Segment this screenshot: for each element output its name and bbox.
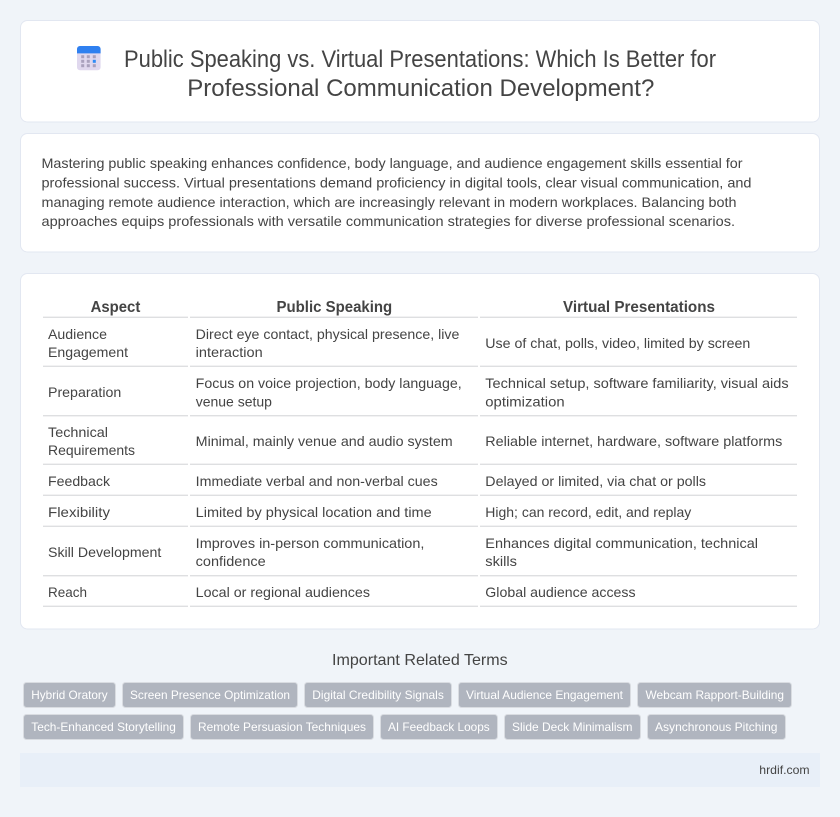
title: Professional Communication Development? <box>187 75 654 102</box>
row: reach: Global audience access <box>485 584 636 600</box>
tag: virtual audience engagement: Virtual Audience Engagement <box>466 688 624 702</box>
title <box>124 46 716 102</box>
row: preparation: optimization <box>485 394 565 410</box>
tag: digital credibility signals: Digital Credibility Signals <box>312 688 444 702</box>
row: technical requirements: Minimal, mainly venue and audio system <box>196 433 453 449</box>
table header row: Aspect <box>91 299 141 316</box>
row: audience engagement <box>48 326 750 360</box>
panel: comparison table <box>20 274 820 629</box>
row: technical requirements <box>48 424 782 458</box>
tag: screen presence optimization <box>122 682 298 708</box>
tag: asynchronous pitching: Asynchronous Pitching <box>655 720 778 734</box>
table header row: Public Speaking <box>276 299 392 316</box>
tag: slide deck minimalism: Slide Deck Minimalism <box>512 720 632 734</box>
tag: hybrid oratory <box>24 682 116 708</box>
row: flexibility: Flexibility <box>48 504 110 520</box>
row: audience engagement: Direct eye contact, physical presence, live <box>196 326 460 342</box>
tag: asynchronous pitching <box>648 714 786 740</box>
row: flexibility <box>48 504 691 520</box>
related terms tags <box>24 682 792 740</box>
intro text block: Mastering public speaking enhances confidence, body language, and audience engagement skills essential for <box>42 155 743 171</box>
intro text block: professional success. Virtual presentations demand proficiency in digital tools, clear visual communication, and <box>42 174 752 190</box>
row: feedback <box>48 473 706 489</box>
footer <box>20 753 820 787</box>
row: reach: Reach <box>48 584 87 600</box>
row: flexibility: High; can record, edit, and replay <box>485 504 691 520</box>
panel: header <box>20 20 820 122</box>
tag: remote persuasion techniques: Remote Persuasion Techniques <box>198 720 366 734</box>
row: feedback: Immediate verbal and non-verbal cues <box>196 473 438 489</box>
tag: tech-enhanced storytelling <box>24 714 184 740</box>
tag: virtual audience engagement <box>458 682 630 708</box>
row: feedback: Delayed or limited, via chat or polls <box>485 473 706 489</box>
heading: important related terms: Important Related Terms <box>332 652 508 669</box>
row: skill development: Enhances digital communication, technical <box>485 535 758 551</box>
row: reach: Local or regional audiences <box>196 584 370 600</box>
tag: ai feedback loops: AI Feedback Loops <box>388 720 490 734</box>
row: preparation: Technical setup, software familiarity, visual aids <box>485 375 789 391</box>
row: technical requirements: Requirements <box>48 442 135 458</box>
tag: digital credibility signals <box>304 682 452 708</box>
table header row <box>91 299 715 316</box>
row: preparation: Focus on voice projection, body language, <box>196 375 462 391</box>
row: skill development: confidence <box>196 553 266 569</box>
row: audience engagement: Engagement <box>48 344 128 360</box>
row: skill development: Skill Development <box>48 544 161 560</box>
row: skill development <box>48 535 758 569</box>
title: Public Speaking vs. Virtual Presentations: Which Is Better for <box>124 46 716 73</box>
row: skill development: skills <box>485 553 517 569</box>
row: technical requirements: Technical <box>48 424 108 440</box>
tag: slide deck minimalism <box>504 714 640 740</box>
row: preparation <box>48 375 789 410</box>
icon: calendar <box>77 46 101 70</box>
intro text block: managing remote audience interaction, which are increasingly relevant in modern workplaces. Balancing both <box>42 194 736 210</box>
row: audience engagement: Audience <box>48 326 107 342</box>
row: skill development: Improves in-person communication, <box>196 535 424 551</box>
footer: hrdif.com <box>759 763 810 777</box>
tag: ai feedback loops <box>380 714 498 740</box>
intro text block <box>42 155 752 229</box>
tag: webcam rapport-building: Webcam Rapport-Building <box>646 688 784 702</box>
row: technical requirements: Reliable internet, hardware, software platforms <box>485 433 782 449</box>
tag: remote persuasion techniques <box>190 714 374 740</box>
row: audience engagement: interaction <box>196 344 263 360</box>
intro text block: approaches equips professionals with versatile communication strategies for diverse professional scenarios. <box>42 213 735 229</box>
panel: introduction <box>20 134 820 252</box>
row: audience engagement: Use of chat, polls, video, limited by screen <box>485 335 750 351</box>
tag: tech-enhanced storytelling: Tech-Enhanced Storytelling <box>31 720 176 734</box>
row: feedback: Feedback <box>48 473 111 489</box>
row: preparation: Preparation <box>48 384 121 400</box>
row: flexibility: Limited by physical location and time <box>196 504 432 520</box>
tag: screen presence optimization: Screen Presence Optimization <box>130 688 290 702</box>
tag: webcam rapport-building <box>638 682 792 708</box>
table header row: Virtual Presentations <box>563 299 715 316</box>
tag: hybrid oratory: Hybrid Oratory <box>31 688 108 702</box>
row: preparation: venue setup <box>196 394 272 410</box>
row: reach <box>48 584 636 600</box>
